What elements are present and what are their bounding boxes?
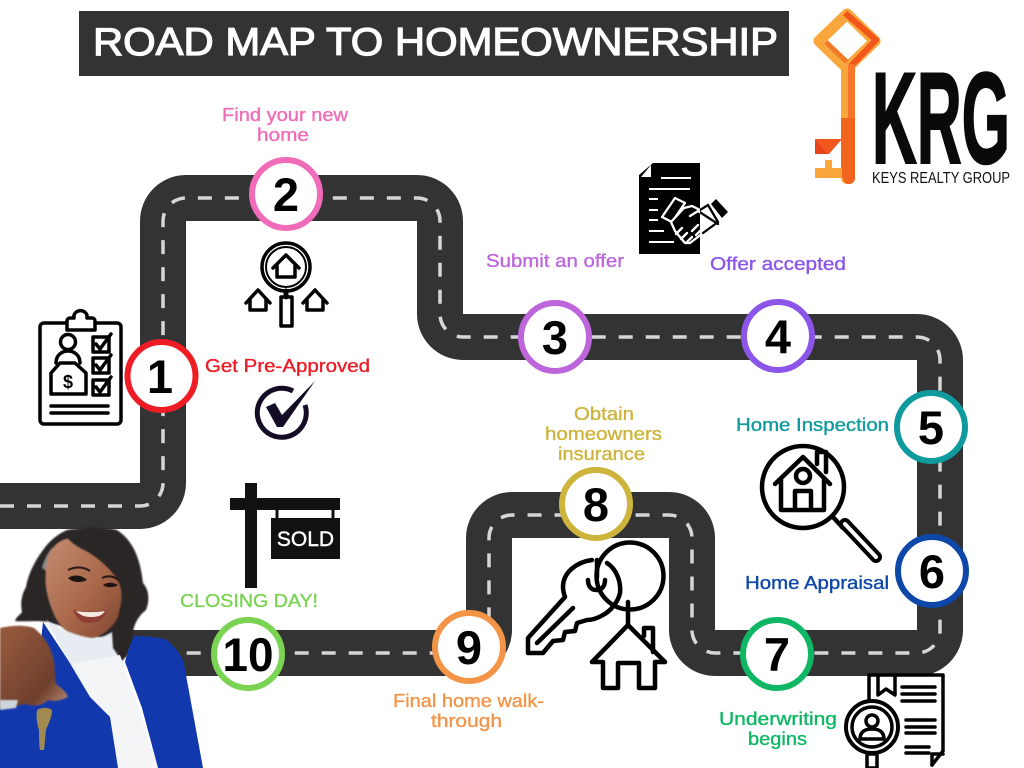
step 8: obtain homeowners insurance: homeowners xyxy=(545,424,662,444)
icon: magnifier over houses xyxy=(246,243,327,326)
step 6: home appraisal: Home Appraisal xyxy=(745,573,889,593)
step 6: home appraisal xyxy=(745,537,966,605)
step 9: final home walk-through xyxy=(393,613,544,731)
hair xyxy=(15,528,148,661)
blazer left side xyxy=(0,622,118,768)
step 1: get pre-approved: Get Pre-Approved xyxy=(205,356,370,376)
step 3: submit an offer: 3 xyxy=(542,311,568,364)
step 6: home appraisal: 6 xyxy=(919,545,945,598)
step 9: final home walk-through: Final home walk- xyxy=(393,691,544,711)
step 7: underwriting begins: 7 xyxy=(764,628,790,681)
step 4: offer accepted: 4 xyxy=(765,310,791,363)
shirt cuff sparkle xyxy=(0,700,18,710)
blazer right side xyxy=(125,636,203,768)
step 10: closing day: CLOSING DAY! xyxy=(180,591,318,611)
icon: contract with handshake xyxy=(639,163,728,254)
step 4: offer accepted xyxy=(710,254,846,370)
step 10: closing day: 10 xyxy=(222,628,274,681)
grey hair highlight xyxy=(42,548,54,574)
icon: sold sign xyxy=(230,483,340,588)
step 3: submit an offer xyxy=(486,251,624,371)
step 7: underwriting begins: begins xyxy=(748,729,807,749)
road xyxy=(0,198,940,653)
portrait: agent holding out keys xyxy=(0,528,203,768)
step 8: obtain homeowners insurance: 8 xyxy=(583,478,609,531)
key xyxy=(37,708,52,750)
hair fringe xyxy=(66,533,136,616)
step 5: home inspection: 5 xyxy=(918,401,944,454)
eyebrows xyxy=(68,567,120,581)
smile xyxy=(73,610,107,623)
icon: clipboard with checklist xyxy=(40,311,121,424)
step 2: find your new home: Find your new xyxy=(222,105,349,125)
step 4: offer accepted: Offer accepted xyxy=(710,254,846,274)
white top xyxy=(72,655,158,768)
step 8: obtain homeowners insurance: insurance xyxy=(558,444,645,464)
icon: certificate under magnifier xyxy=(846,675,943,768)
icon: check mark in circle xyxy=(257,381,315,437)
step 7: underwriting begins: Underwriting xyxy=(719,709,837,729)
step 2: find your new home: home xyxy=(257,125,309,145)
logo: Keys Realty Group xyxy=(815,13,1010,191)
step 10: closing day xyxy=(180,591,318,688)
step 1: get pre-approved: 1 xyxy=(147,350,173,403)
step 8: obtain homeowners insurance: Obtain xyxy=(574,404,634,424)
step 1: get pre-approved xyxy=(128,342,370,410)
hand xyxy=(0,626,68,708)
title: ROAD MAP TO HOMEOWNERSHIP xyxy=(93,21,778,64)
step 7: underwriting begins xyxy=(719,620,837,749)
step 2: find your new home: 2 xyxy=(273,168,299,221)
icon: sold sign: SOLD xyxy=(277,528,334,551)
title xyxy=(79,11,789,76)
step 9: final home walk-through: through xyxy=(431,711,502,731)
eyes xyxy=(68,576,118,587)
step 9: final home walk-through: 9 xyxy=(456,621,482,674)
icon: orange key xyxy=(815,13,876,184)
turtleneck xyxy=(46,620,124,698)
step 2: find your new home xyxy=(222,105,349,228)
icon: clipboard with checklist: $ xyxy=(63,372,73,392)
step 5: home inspection xyxy=(736,393,965,461)
icon: magnifier inspecting house xyxy=(762,446,876,557)
step 5: home inspection: Home Inspection xyxy=(736,415,889,435)
step 3: submit an offer: Submit an offer xyxy=(486,251,624,271)
icon: house keys xyxy=(528,542,665,688)
step 8: obtain homeowners insurance xyxy=(545,404,662,538)
face and neck xyxy=(45,538,123,640)
